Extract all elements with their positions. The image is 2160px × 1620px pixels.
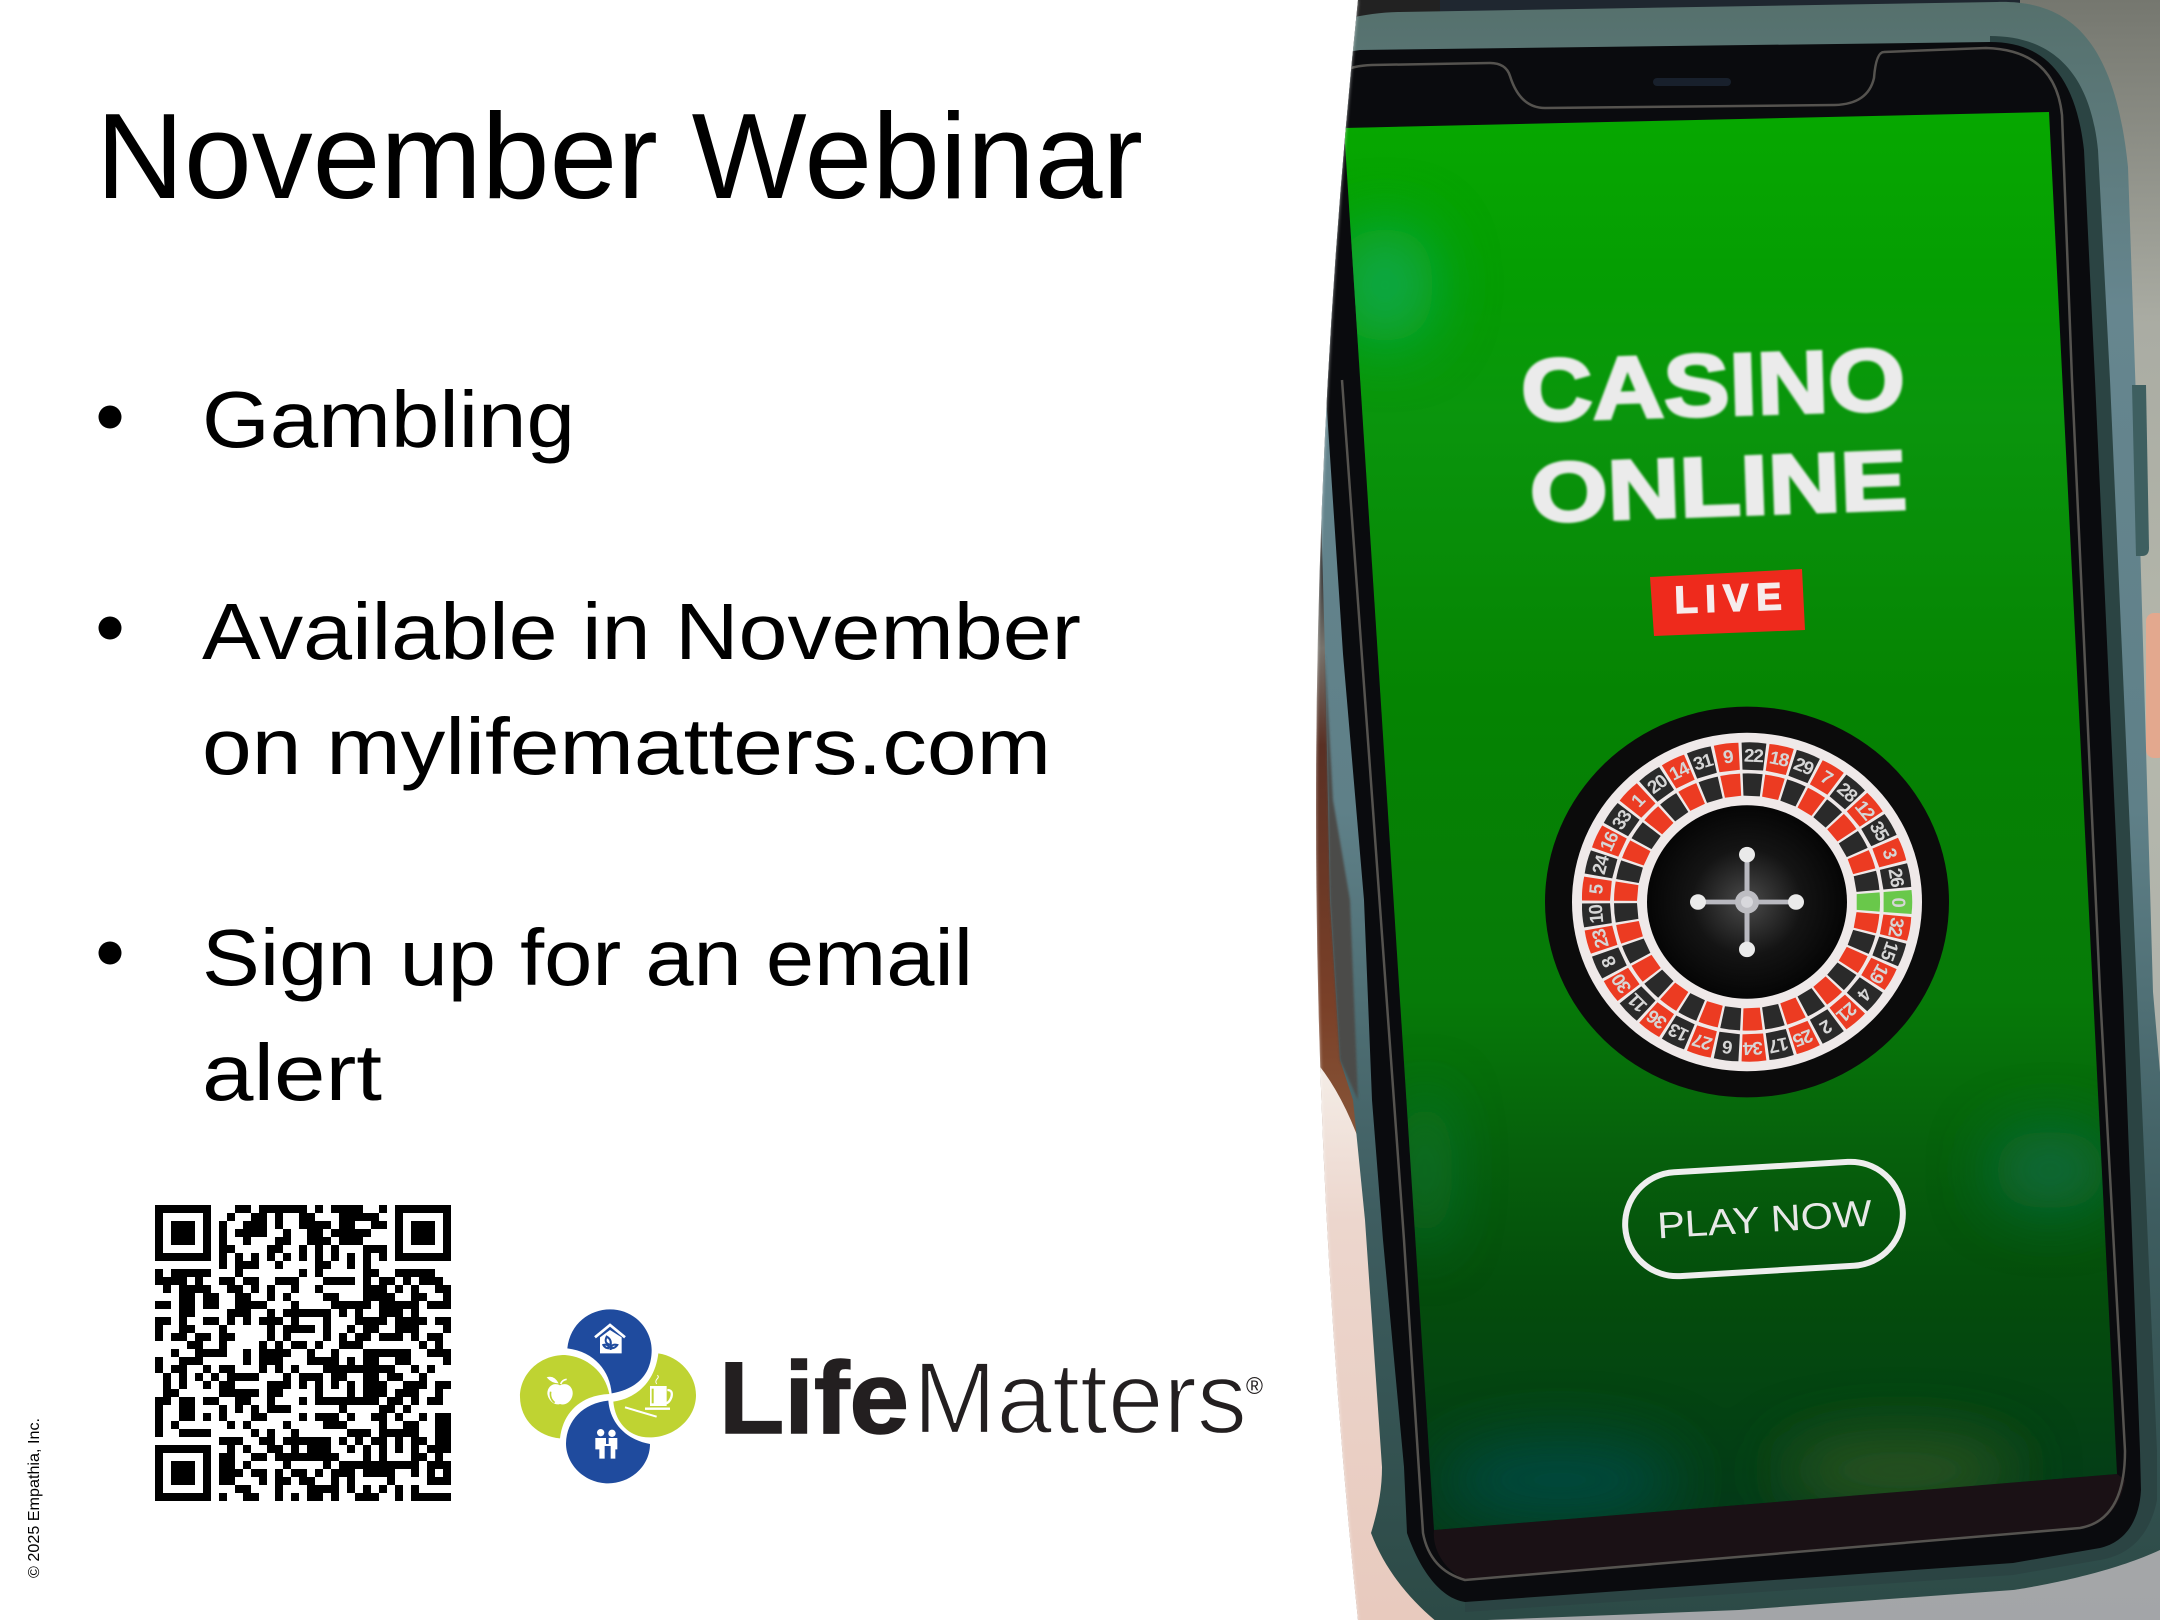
screen gradient (1340, 100, 2140, 1540)
bullet: available in november: on mylifematters.com (202, 702, 1051, 791)
screen reflections (1335, 225, 2110, 1520)
bullet: available in november (98, 587, 1081, 791)
pockets and numbers: 0 (1888, 897, 1909, 907)
pockets and numbers: 17 (1767, 1033, 1790, 1057)
QR code (155, 1205, 451, 1501)
pockets and numbers: 14 (1666, 757, 1694, 784)
pockets and numbers: 12 (1851, 796, 1880, 824)
hub cross (1690, 847, 1804, 957)
copyright notice: © 2025 Empathia, Inc. (26, 1418, 43, 1578)
white slide panel (0, 0, 1357, 1620)
logo wordmark: ® (1246, 1373, 1263, 1400)
bullet: email alert: alert (202, 1028, 382, 1117)
pockets and numbers: 10 (1584, 904, 1607, 924)
photo background (1300, 0, 2160, 1620)
bullet: available in november: Available in November (202, 587, 1081, 676)
pockets and numbers: 16 (1595, 828, 1623, 854)
logo symbol (520, 1309, 696, 1483)
pockets and numbers: 32 (1884, 916, 1909, 938)
white ring (1572, 733, 1922, 1071)
dark strip above phone (1300, 0, 2020, 24)
wheel hub (1647, 805, 1847, 999)
pockets and numbers: 20 (1643, 770, 1671, 798)
logo wordmark: Life (719, 1341, 909, 1455)
left green petal with apple icon (520, 1355, 609, 1438)
logo wordmark: Matters (913, 1341, 1247, 1455)
logo wordmark (719, 1341, 1263, 1455)
pockets and numbers: 11 (1623, 990, 1651, 1017)
pockets and numbers: 13 (1665, 1019, 1692, 1046)
wheel rim (1545, 707, 1949, 1097)
title: November Webinar (96, 88, 1143, 224)
pockets and numbers: 2 (1816, 1016, 1836, 1038)
pockets and numbers: 34 (1742, 1038, 1763, 1059)
pockets and numbers: 4 (1853, 984, 1876, 1005)
bullet: email alert: Sign up for an email (202, 913, 973, 1002)
LifeMatters logo (520, 1309, 1263, 1483)
phone bezel (1300, 42, 2141, 1602)
speaker grille (1653, 78, 1731, 86)
pockets and numbers: 9 (1722, 746, 1735, 767)
pockets and numbers: 29 (1791, 753, 1817, 779)
fingernail on the left (1320, 1067, 1434, 1620)
pockets and numbers: 31 (1691, 749, 1715, 774)
word online: ONLINE (1528, 433, 1908, 540)
dark inner band of the case (1710, 36, 2157, 1596)
pockets and numbers: 19 (1865, 961, 1893, 987)
pockets and numbers (1581, 742, 1912, 1062)
bottom band of the screen (1434, 1474, 2125, 1580)
pockets and numbers: 22 (1744, 745, 1764, 766)
pockets and numbers: 26 (1884, 867, 1909, 889)
photo: hand holding phone (1300, 0, 2160, 1620)
pockets and numbers: 35 (1865, 818, 1894, 844)
play now button (1622, 1159, 1906, 1279)
pockets and numbers: 5 (1585, 883, 1607, 895)
side button (2132, 385, 2149, 556)
bullet: gambling: Gambling (202, 375, 575, 464)
bottom blue petal with family icon (566, 1401, 650, 1483)
pockets and numbers: 30 (1607, 970, 1635, 997)
pockets and numbers: 27 (1690, 1029, 1715, 1055)
roulette wheel (1545, 707, 1949, 1097)
pockets and numbers: 15 (1876, 939, 1903, 964)
pockets and numbers: 7 (1817, 766, 1837, 789)
pockets and numbers: 36 (1642, 1006, 1671, 1034)
pockets and numbers: 33 (1607, 806, 1636, 833)
fingers of the hand on the left (1316, 0, 1440, 1620)
phone screen (1335, 100, 2140, 1540)
pockets and numbers: 25 (1790, 1025, 1816, 1051)
pockets and numbers: 21 (1832, 998, 1861, 1026)
phone case (1300, 2, 2160, 1620)
pockets and numbers: 24 (1588, 852, 1613, 876)
word casino: CASINO (1520, 330, 1906, 440)
right green petal with mug icon (613, 1353, 696, 1437)
pockets and numbers: 3 (1878, 845, 1902, 862)
live badge (1650, 569, 1805, 636)
screen edge line with notch (1342, 48, 2125, 1580)
pockets and numbers: 1 (1627, 790, 1649, 811)
finger on the right (2146, 613, 2160, 758)
casino online heading (1520, 330, 1908, 540)
pockets and numbers: 8 (1597, 953, 1621, 971)
live badge: LIVE (1674, 576, 1782, 622)
pockets and numbers: 23 (1587, 927, 1613, 950)
bullet list (98, 375, 1081, 1117)
top blue petal with house icon (567, 1309, 652, 1393)
bullet: email alert (98, 913, 973, 1117)
pockets and numbers: 28 (1833, 778, 1862, 806)
case shadow stripe (1325, 654, 1358, 1100)
pockets and numbers: 18 (1768, 747, 1791, 771)
pockets and numbers: 6 (1721, 1037, 1734, 1058)
play now button: PLAY NOW (1656, 1193, 1873, 1246)
